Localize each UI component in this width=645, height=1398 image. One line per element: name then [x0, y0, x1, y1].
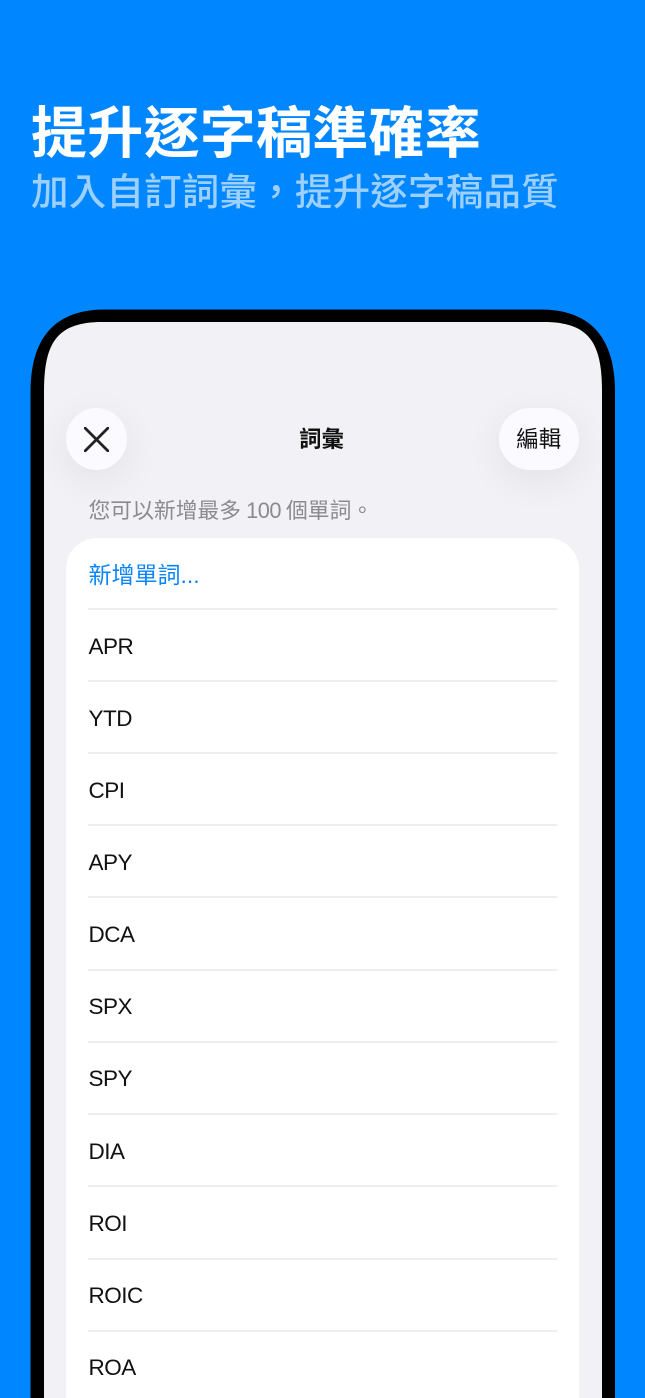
close button	[66, 408, 127, 470]
screen heading: 詞彙	[299, 427, 344, 452]
subtitle: 加入自訂詞彙，提升逐字稿品質	[31, 171, 559, 213]
word: APY: APY	[88, 850, 132, 875]
divider lines	[88, 608, 557, 1332]
edit button: 編輯	[516, 427, 561, 452]
phone screen	[44, 322, 602, 1398]
word: SPY: SPY	[88, 1066, 132, 1091]
word: CPI: CPI	[88, 778, 125, 803]
vocabulary list card	[66, 538, 579, 1398]
word: YTD: YTD	[88, 706, 132, 731]
icon: close X	[84, 427, 109, 452]
title: 提升逐字稿準確率	[31, 102, 481, 165]
word: DCA: DCA	[88, 922, 135, 947]
word: ROIC: ROIC	[88, 1283, 143, 1308]
add word row: 新增單詞...	[88, 562, 200, 588]
helper text: 您可以新增最多100個單詞。	[88, 498, 373, 523]
word: APR: APR	[88, 634, 133, 659]
word: DIA: DIA	[88, 1139, 125, 1164]
edit button	[498, 408, 579, 470]
word: ROA: ROA	[88, 1355, 136, 1380]
word: SPX: SPX	[88, 994, 132, 1019]
phone body	[30, 310, 615, 1398]
word: ROI: ROI	[88, 1211, 127, 1236]
